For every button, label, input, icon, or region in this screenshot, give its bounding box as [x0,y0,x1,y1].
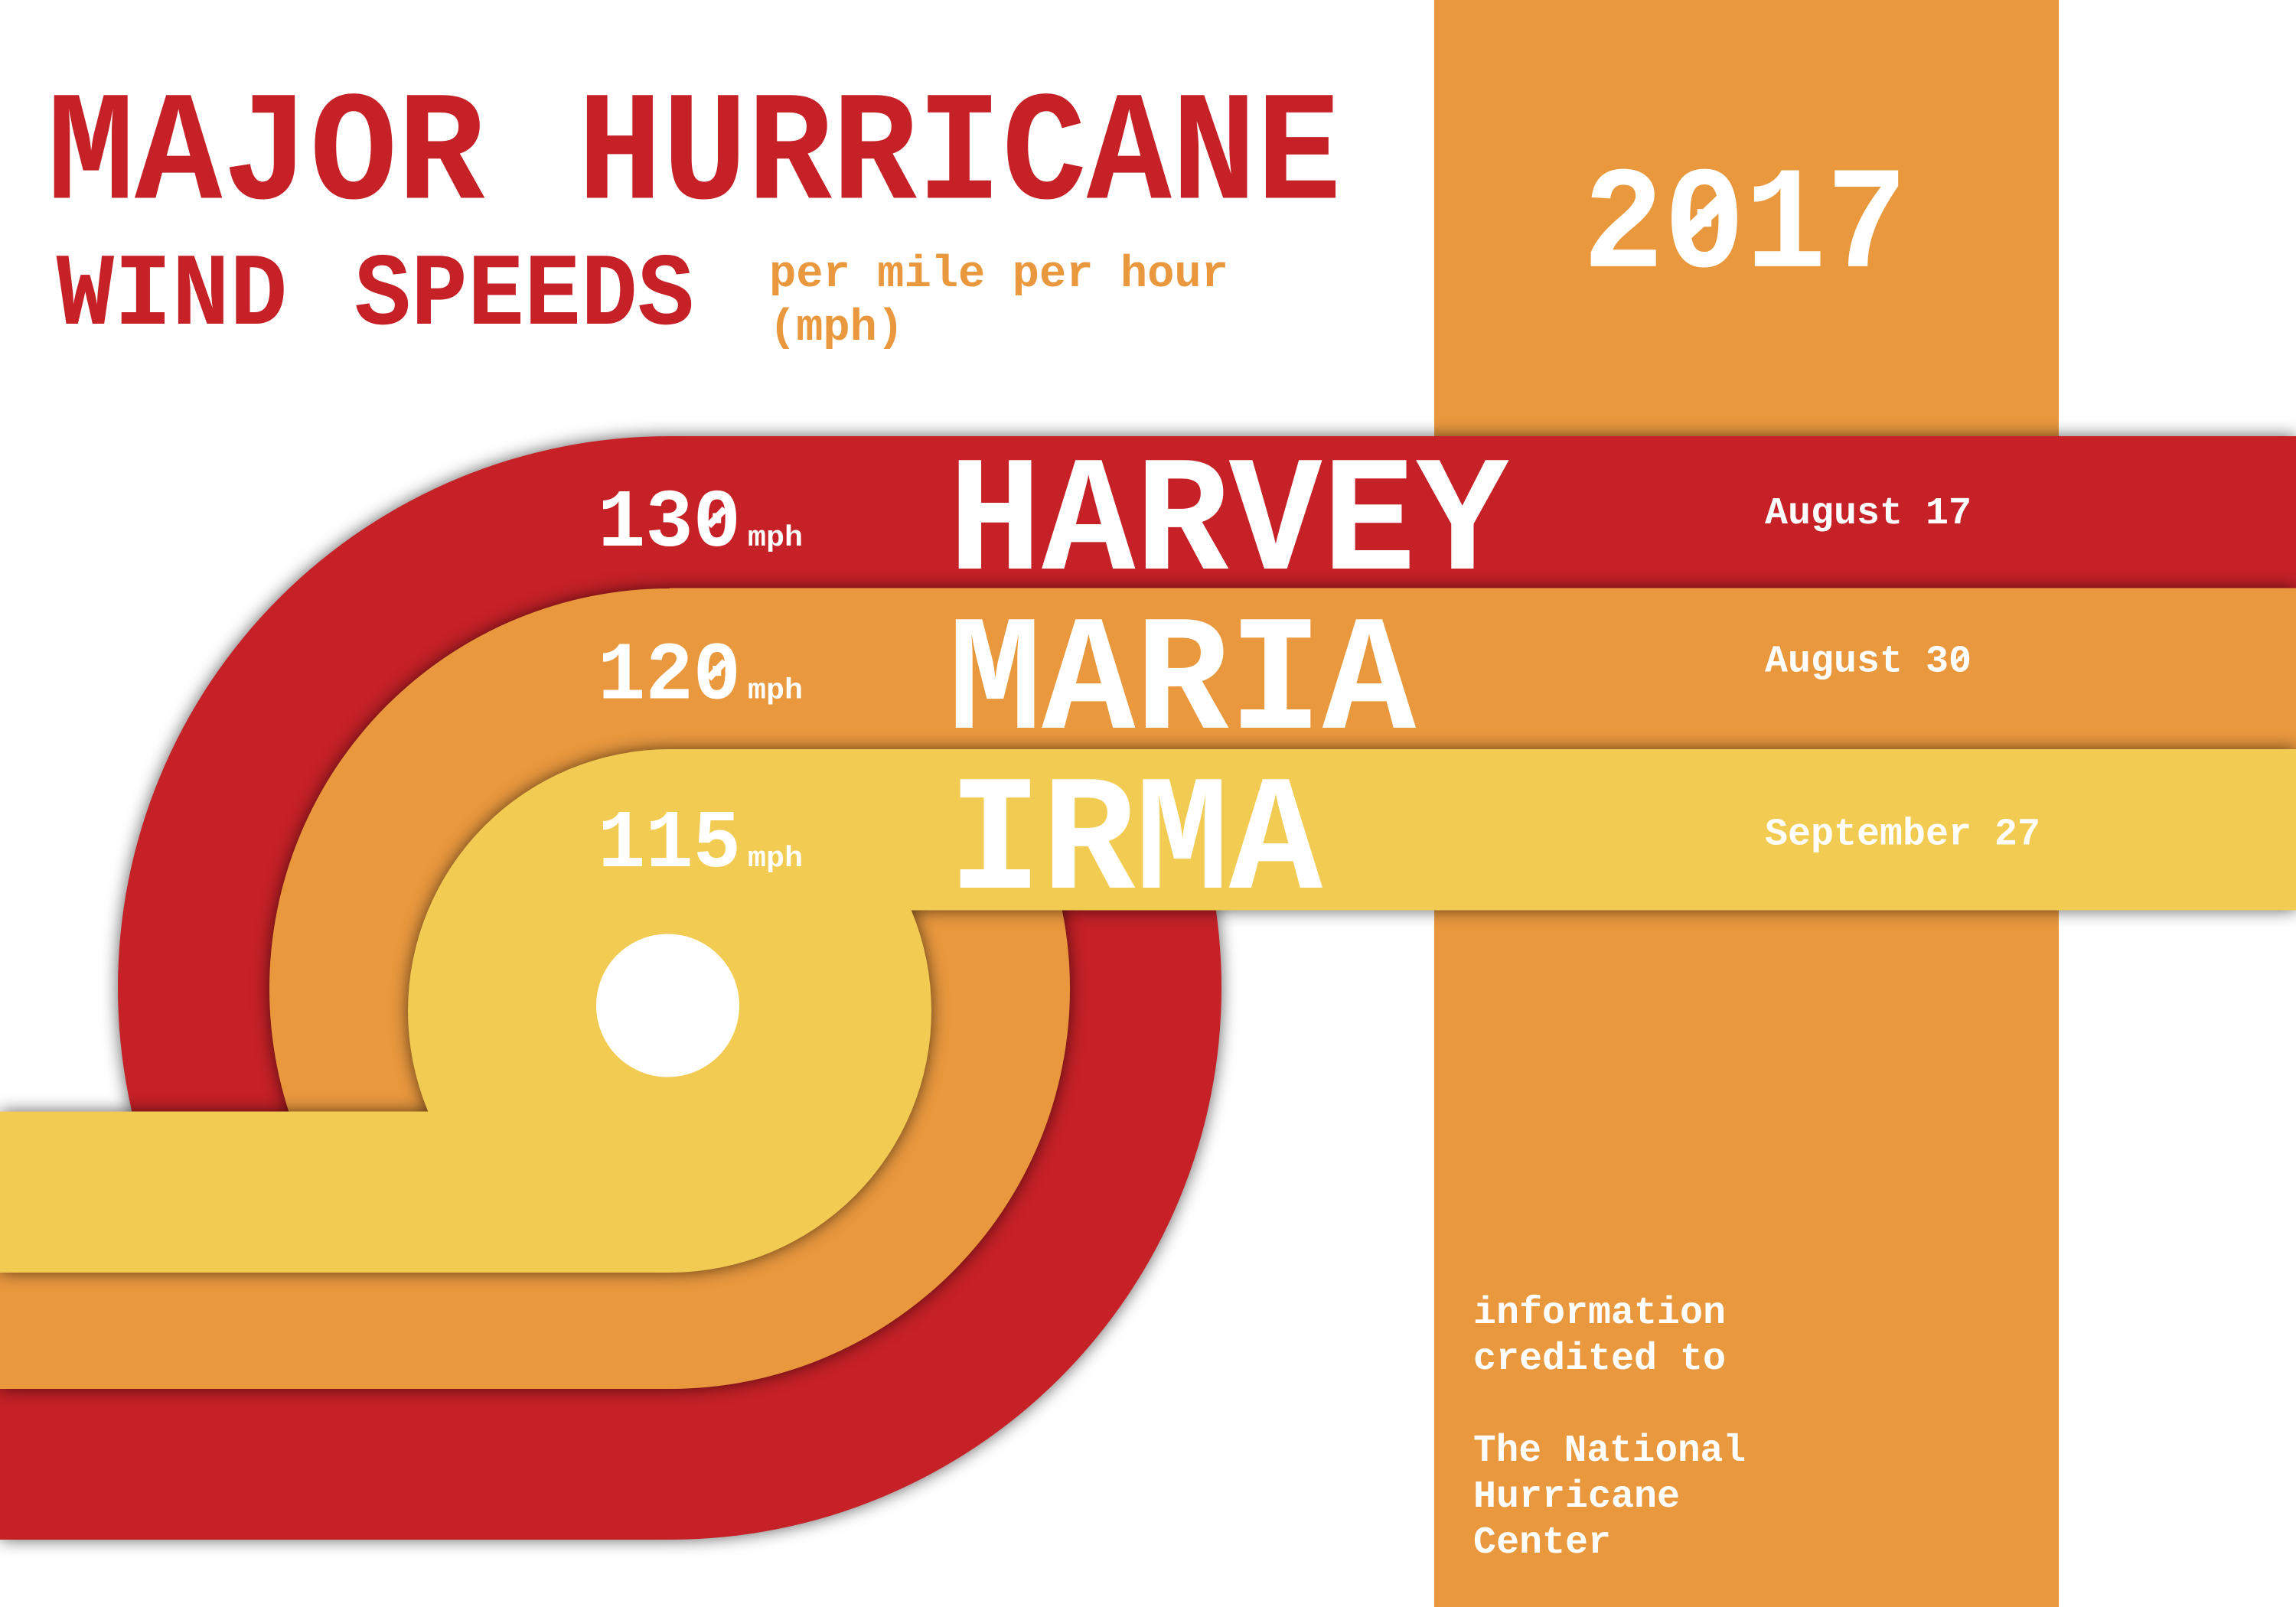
band: Harvey red spiral [0,436,2296,1540]
credit text: Hurricane [1473,1475,1680,1519]
row: Harvey: HARVEY [948,432,1509,618]
row: Irma: September 27 [1765,813,2040,857]
credit text [1473,1292,1746,1565]
row: Harvey: 130 [598,478,741,571]
subtitle: wind speeds: SPEEDS [354,238,694,355]
panel: orange vertical column [1434,0,2059,1607]
row: Harvey: mph [748,522,803,555]
row: Harvey [598,432,1971,618]
credit text: information [1473,1292,1726,1335]
subtitle: wind speeds [57,238,694,355]
row: Harvey: August 17 [1765,492,1971,536]
row: Irma: 115 [598,798,741,892]
row: Irma: IRMA [948,751,1322,937]
credit text: credited to [1473,1338,1726,1381]
subtitle: wind speeds: WIND [57,238,288,355]
credit text: Center [1473,1521,1611,1565]
unit note: per mile per hour [769,250,1228,354]
row: Maria: MARIA [948,591,1416,777]
unit note: per mile per hour: per mile per hour [769,250,1228,300]
unit note: per mile per hour: (mph) [769,304,904,354]
row: Maria [598,591,1971,777]
row: Maria: August 30 [1765,640,1971,684]
credit text: The National [1473,1429,1746,1473]
band: Irma yellow spiral [0,749,2296,1273]
year: 2017: 2017 [1583,146,1907,311]
row: Maria: 120 [598,630,741,723]
title: major hurricane [47,68,1341,245]
title: major hurricane: HURRICANE [577,68,1341,245]
band: Maria orange spiral [0,588,2296,1389]
row: Maria: mph [748,675,803,707]
icon: hurricane eye [596,934,739,1077]
row: Irma [598,751,2040,937]
row: Irma: mph [748,843,803,875]
title: major hurricane: MAJOR [47,68,485,245]
